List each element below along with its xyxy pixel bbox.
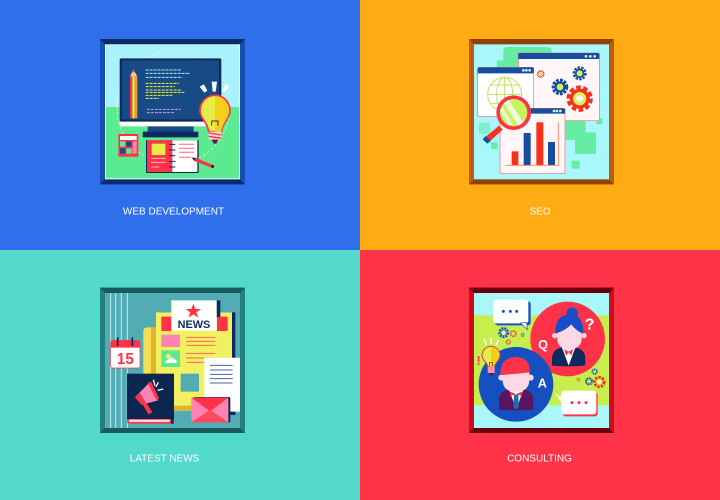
question circle with woman: Q [538, 338, 548, 352]
book with megaphone [127, 374, 174, 424]
question circle with woman: ? [585, 316, 595, 333]
bar chart window [500, 108, 565, 173]
speech bubble top [493, 300, 531, 330]
envelope [191, 397, 230, 422]
icon: latest news illustration [100, 288, 245, 433]
panel: consulting background [360, 250, 720, 500]
magnifying glass [483, 95, 531, 144]
light bulb [200, 82, 230, 144]
panel: SEO background [360, 0, 720, 250]
pencil [130, 69, 137, 118]
back newspapers [143, 312, 235, 411]
NEWS masthead [171, 300, 220, 331]
NEWS masthead: NEWS [178, 319, 211, 331]
answer circle with man: A [538, 376, 547, 390]
document [204, 358, 240, 415]
globe window [478, 67, 534, 116]
monitor [120, 58, 221, 137]
idea bulb [477, 338, 500, 376]
icon: consulting illustration [469, 288, 614, 433]
gear window [518, 53, 599, 121]
label: web development: WEB DEVELOPMENT [123, 206, 224, 218]
icon: SEO illustration [469, 39, 614, 184]
question circle with woman [530, 302, 605, 376]
idea bulb: ! [477, 354, 481, 368]
gears [538, 68, 590, 109]
icon: web development illustration [100, 39, 245, 184]
calculator [118, 134, 138, 157]
gears top [499, 328, 524, 344]
notebook [146, 140, 214, 173]
label: SEO: SEO [529, 206, 551, 218]
gears bottom [577, 369, 604, 387]
speech bubble bottom [555, 391, 598, 416]
panel: web development background [0, 0, 360, 250]
label: consulting: CONSULTING [507, 454, 572, 464]
panel: latest news background [0, 250, 360, 500]
article blocks [161, 335, 215, 392]
calendar: 15 [117, 351, 134, 368]
label: latest news: LATEST NEWS [130, 454, 200, 464]
code lines [146, 70, 190, 113]
calendar [111, 338, 140, 368]
answer circle with man [479, 347, 553, 422]
